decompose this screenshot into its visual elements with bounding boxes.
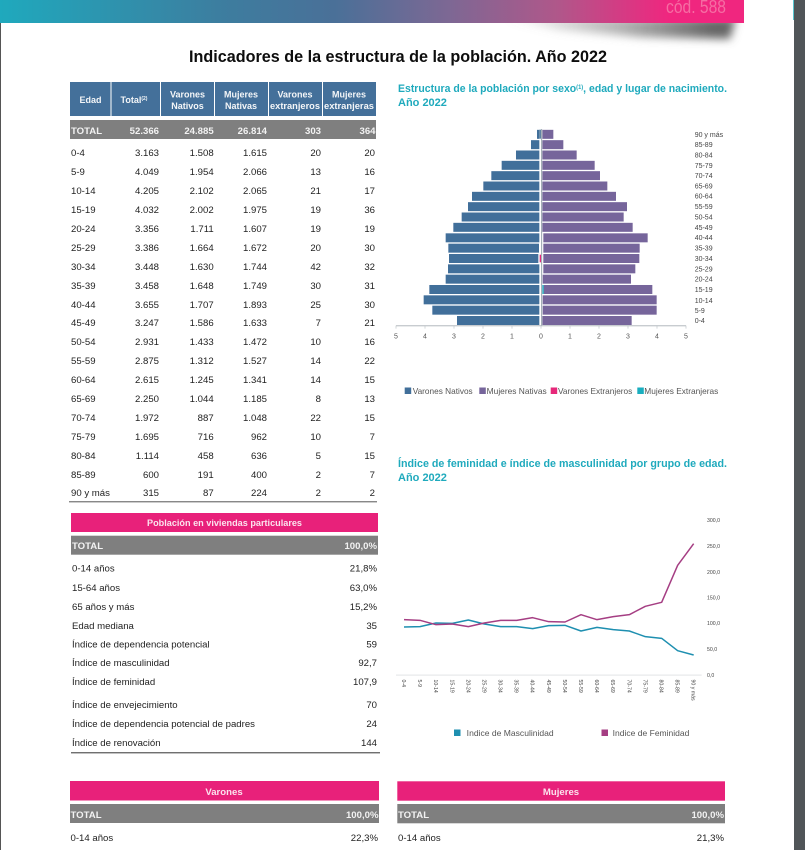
heading: pyramid chart xyxy=(398,83,727,109)
age rows: 15 xyxy=(364,451,375,462)
axis labels: 2 xyxy=(481,334,485,340)
age rows: 3.356 xyxy=(135,224,159,235)
x axis labels: 55-59 xyxy=(577,680,583,693)
y axis labels: 50,0 xyxy=(707,647,717,653)
age rows: 1.972 xyxy=(135,413,159,424)
indicator rows: 24 xyxy=(366,719,378,730)
age rows: 887 xyxy=(198,413,214,424)
age labels: 0-4 xyxy=(695,318,705,325)
axis labels: 0 xyxy=(539,334,543,340)
age rows: 22 xyxy=(310,413,321,424)
age rows: 15-19 xyxy=(71,205,96,216)
age labels xyxy=(695,132,724,325)
age rows: 2.102 xyxy=(190,186,214,197)
age rows: 1.711 xyxy=(190,224,214,235)
age rows: 962 xyxy=(251,432,267,443)
age rows: 20 xyxy=(310,243,321,254)
age rows: 1.695 xyxy=(135,432,159,443)
age rows: 1.607 xyxy=(243,224,267,235)
x axis labels: 40-44 xyxy=(529,680,535,693)
age rows: 70-74 xyxy=(71,413,96,424)
x axis labels: 90 y más xyxy=(690,680,696,701)
axis labels: 4 xyxy=(423,334,427,340)
panel: mujeres xyxy=(397,781,725,844)
axis labels: 5 xyxy=(394,334,398,340)
heading: pyramid chart: , edad y lugar de nacimiento. xyxy=(583,83,727,95)
indicator rows: 63,0% xyxy=(350,583,377,594)
indicator rows: 59 xyxy=(366,640,377,651)
y axis labels xyxy=(707,518,720,679)
age labels: 35-39 xyxy=(695,246,713,252)
indicator rows: Índice de dependencia potencial de padres xyxy=(72,719,255,730)
age rows: 7 xyxy=(370,470,375,481)
x axis labels: 65-69 xyxy=(609,680,615,693)
age rows: 1.245 xyxy=(190,375,214,386)
age rows: 40-44 xyxy=(71,300,96,311)
table header: extranjeros xyxy=(270,101,320,111)
x axis labels xyxy=(400,680,696,701)
total row: 24.885 xyxy=(184,126,214,137)
age rows: 35-39 xyxy=(71,281,96,292)
panel: varones: Varones xyxy=(205,787,243,798)
age rows: 1.707 xyxy=(190,300,214,311)
age rows: 1.114 xyxy=(136,451,160,462)
total row: 364 xyxy=(359,126,376,137)
total row: TOTAL xyxy=(72,541,103,552)
age labels: 60-64 xyxy=(695,194,713,200)
axis labels: 2 xyxy=(597,334,601,340)
axis labels: 1 xyxy=(510,334,514,340)
age rows: 2.002 xyxy=(190,205,214,216)
age rows: 19 xyxy=(310,205,321,216)
age rows: 458 xyxy=(198,451,214,462)
age rows: 19 xyxy=(310,224,321,235)
age rows: 10 xyxy=(310,337,321,348)
age rows: 85-89 xyxy=(71,470,96,481)
age labels: 85-89 xyxy=(695,142,713,149)
age rows: 21 xyxy=(364,318,375,329)
age rows: 1.341 xyxy=(243,375,267,386)
age labels: 20-24 xyxy=(695,276,713,284)
age rows: 20 xyxy=(310,148,321,159)
age labels: 70-74 xyxy=(695,173,713,180)
age rows: 10-14 xyxy=(71,186,96,197)
age rows: 30-34 xyxy=(71,262,96,273)
age rows: 1.048 xyxy=(243,413,267,424)
age rows: 7 xyxy=(316,318,321,329)
age rows: 4.205 xyxy=(135,186,159,197)
panel: mujeres: 100,0% xyxy=(691,810,724,821)
age labels: 55-59 xyxy=(695,204,713,211)
panel: población en viviendas particulares xyxy=(71,513,380,753)
age rows: 2.250 xyxy=(135,394,159,405)
age rows: 13 xyxy=(364,394,375,405)
table header: Nativas xyxy=(225,101,257,111)
panel heading: Población en viviendas particulares xyxy=(147,518,302,529)
x axis labels: 75-79 xyxy=(641,680,647,693)
age rows: 50-54 xyxy=(71,337,96,348)
age rows: 17 xyxy=(364,186,375,197)
age rows: 1.633 xyxy=(243,318,267,329)
age rows: 32 xyxy=(364,262,375,273)
table header: Mujeres xyxy=(332,90,366,100)
indicator rows: 107,9 xyxy=(353,677,377,688)
age rows: 36 xyxy=(364,205,375,216)
age rows: 42 xyxy=(310,262,321,273)
age rows: 10 xyxy=(310,432,321,443)
age rows: 716 xyxy=(198,432,214,443)
age labels: 10-14 xyxy=(695,298,713,305)
age rows: 19 xyxy=(364,224,375,235)
age rows: 315 xyxy=(143,488,159,499)
y axis labels: 250,0 xyxy=(707,544,720,550)
panel: varones: 22,3% xyxy=(351,833,378,844)
x axis labels: 20-24 xyxy=(464,680,470,693)
age rows: 80-84 xyxy=(71,451,96,462)
axis labels: 5 xyxy=(684,334,688,340)
axis labels: 1 xyxy=(568,334,572,340)
panel: mujeres: 21,3% xyxy=(697,833,724,844)
total row xyxy=(71,536,378,555)
age rows: 1.648 xyxy=(190,281,214,292)
total row: 26.814 xyxy=(238,126,268,137)
age rows: 1.044 xyxy=(190,394,214,405)
line chart legend: Indice de Masculinidad xyxy=(467,728,554,738)
age rows: 60-64 xyxy=(71,375,96,386)
age labels: 45-49 xyxy=(695,225,713,232)
age rows: 20-24 xyxy=(71,224,96,235)
indicator rows: 0-14 años xyxy=(72,564,115,575)
age rows: 25 xyxy=(310,300,321,311)
age rows: 2.875 xyxy=(135,356,159,367)
axis labels xyxy=(394,334,688,340)
panel: varones: 0-14 años xyxy=(70,833,113,844)
total row: TOTAL xyxy=(71,126,102,137)
table header: Varones xyxy=(277,90,313,100)
table header: Varones xyxy=(170,90,205,100)
y axis labels: 150,0 xyxy=(707,596,720,602)
table header: Mujeres xyxy=(224,90,258,100)
panel: mujeres: Mujeres xyxy=(543,787,579,798)
age rows: 1.749 xyxy=(243,281,267,292)
x axis labels: 70-74 xyxy=(625,680,631,693)
age rows: 191 xyxy=(198,470,214,481)
x axis labels: 80-84 xyxy=(657,680,663,693)
age rows: 87 xyxy=(203,488,214,499)
age rows: 45-49 xyxy=(71,318,96,329)
age rows: 16 xyxy=(364,167,375,178)
age rows: 90 y más xyxy=(71,488,110,499)
age labels: 25-29 xyxy=(695,266,713,274)
x axis labels: 45-49 xyxy=(545,680,551,693)
age rows: 30 xyxy=(310,281,321,292)
age rows: 5-9 xyxy=(71,167,85,178)
line chart legend: Indice de Feminidad xyxy=(613,728,690,738)
age rows: 5 xyxy=(316,451,321,462)
age rows: 3.655 xyxy=(135,300,159,311)
age rows: 1.312 xyxy=(190,356,214,367)
indicator rows: 15,2% xyxy=(350,602,377,613)
age rows: 0-4 xyxy=(71,148,86,159)
panel: varones: 100,0% xyxy=(346,810,379,821)
y axis labels: 100,0 xyxy=(707,621,720,627)
indicator rows: 70 xyxy=(366,700,377,711)
line chart legend xyxy=(454,728,690,738)
heading: pyramid chart: (1) xyxy=(576,85,583,91)
age labels: 30-34 xyxy=(695,256,713,263)
panel: varones: TOTAL xyxy=(70,810,102,821)
total row: 52.366 xyxy=(130,126,159,137)
age rows: 1.975 xyxy=(243,205,267,216)
title: Indicadores de la estructura de la población. Año 2022 xyxy=(189,47,607,66)
age rows: 3.247 xyxy=(135,318,159,329)
heading: line chart: Año 2022 xyxy=(398,472,447,484)
age rows: 1.185 xyxy=(243,394,267,405)
age rows: 2 xyxy=(316,488,321,499)
x axis labels: 60-64 xyxy=(593,680,599,693)
age rows: 22 xyxy=(364,356,375,367)
panel heading xyxy=(71,513,378,532)
age rows: 1.586 xyxy=(190,318,214,329)
age rows: 1.672 xyxy=(243,243,267,254)
age rows: 4.049 xyxy=(135,167,159,178)
age rows: 8 xyxy=(316,394,321,405)
indicator rows: 144 xyxy=(361,738,378,749)
age rows: 14 xyxy=(310,356,322,367)
total row xyxy=(70,120,376,139)
age rows: 75-79 xyxy=(71,432,96,443)
y axis labels: 200,0 xyxy=(707,570,720,576)
age rows: 14 xyxy=(310,375,322,386)
x axis labels: 35-39 xyxy=(513,680,519,693)
total row: 303 xyxy=(305,126,321,137)
indicator rows xyxy=(71,564,380,753)
indicator rows: 65 años y más xyxy=(72,602,135,613)
indicator rows: Índice de renovación xyxy=(72,738,161,749)
age rows: 636 xyxy=(251,451,267,462)
heading: pyramid chart: Año 2022 xyxy=(398,97,447,109)
age rows: 13 xyxy=(310,167,321,178)
age rows: 2.066 xyxy=(243,167,267,178)
indicator rows: Edad mediana xyxy=(72,621,135,632)
table header: (2) xyxy=(141,96,148,102)
heading: line chart: Índice de feminidad e índice de masculinidad por grupo de edad. xyxy=(398,457,727,470)
pyramid legend: Varones Extranjeros xyxy=(558,386,632,396)
age rows: 1.472 xyxy=(243,337,267,348)
indicator rows: Índice de envejecimiento xyxy=(72,700,178,711)
age rows: 16 xyxy=(364,337,375,348)
heading: line chart xyxy=(398,457,727,484)
age rows: 400 xyxy=(251,470,267,481)
y axis labels: 0,0 xyxy=(707,673,714,679)
age labels: 40-44 xyxy=(695,235,713,242)
age rows: 1.954 xyxy=(190,167,214,178)
age rows: 15 xyxy=(364,375,375,386)
x axis labels: 25-29 xyxy=(480,680,486,693)
age rows: 3.163 xyxy=(135,148,159,159)
x axis labels: 50-54 xyxy=(561,680,567,693)
age rows: 30 xyxy=(364,300,375,311)
indicator rows: 35 xyxy=(366,621,377,632)
age rows: 1.433 xyxy=(190,337,214,348)
age rows: 1.664 xyxy=(190,243,214,254)
indicator rows: Índice de dependencia potencial xyxy=(72,640,210,651)
age rows: 600 xyxy=(143,470,159,481)
x axis labels: 5-9 xyxy=(416,680,422,687)
age rows: 3.458 xyxy=(135,281,159,292)
total row: 100,0% xyxy=(344,541,377,552)
age rows: 20 xyxy=(364,148,375,159)
y axis labels: 300,0 xyxy=(707,518,720,524)
age rows: 4.032 xyxy=(135,205,159,216)
age rows: 2 xyxy=(370,488,375,499)
age rows: 25-29 xyxy=(71,243,96,254)
x axis labels: 30-34 xyxy=(496,680,502,693)
indicator rows: 15-64 años xyxy=(72,583,120,594)
age rows: 2.931 xyxy=(135,337,159,348)
axis labels: 3 xyxy=(626,334,630,340)
panel: population table xyxy=(69,82,377,502)
table header: extranjeras xyxy=(324,101,374,111)
table header xyxy=(70,82,376,116)
table header: Total xyxy=(121,95,141,105)
pyramid bars xyxy=(396,129,686,329)
table header: Nativos xyxy=(171,101,204,111)
age labels: 75-79 xyxy=(695,163,713,170)
age rows: 1.527 xyxy=(243,356,267,367)
age rows: 2.615 xyxy=(135,375,159,386)
panel: varones xyxy=(70,781,379,844)
age rows: 2.065 xyxy=(243,186,267,197)
age labels: 90 y más xyxy=(695,132,724,139)
chart: masculinity and femininity index xyxy=(396,518,720,738)
age rows: 65-69 xyxy=(71,394,96,405)
x axis labels: 10-14 xyxy=(432,680,438,693)
age rows xyxy=(69,148,377,502)
table header: Edad xyxy=(79,95,102,105)
axis labels: 3 xyxy=(452,334,456,340)
pyramid legend: Varones Nativos xyxy=(413,386,473,396)
age rows: 1.744 xyxy=(243,262,268,273)
chart: population pyramid xyxy=(394,129,724,396)
age rows: 3.386 xyxy=(135,243,159,254)
age rows: 7 xyxy=(370,432,375,443)
panel: mujeres: TOTAL xyxy=(398,810,429,821)
age rows: 1.893 xyxy=(243,300,267,311)
indicator rows: Índice de masculinidad xyxy=(72,658,170,669)
heading: pyramid chart: Estructura de la población por sexo xyxy=(398,83,585,95)
age rows: 3.448 xyxy=(135,262,159,273)
age rows: 15 xyxy=(364,413,375,424)
chart axis and lines xyxy=(396,544,702,675)
indicator rows: Índice de feminidad xyxy=(72,677,155,688)
x axis labels: 15-19 xyxy=(448,680,454,693)
indicator rows: 21,8% xyxy=(350,564,377,575)
axis labels: 4 xyxy=(655,334,659,340)
x axis labels: 0-4 xyxy=(400,680,406,687)
age labels: 50-54 xyxy=(695,214,713,222)
age rows: 21 xyxy=(310,186,321,197)
x axis labels: 85-89 xyxy=(674,680,680,693)
age labels: 80-84 xyxy=(695,152,713,160)
age rows: 1.615 xyxy=(243,148,267,159)
age rows: 2 xyxy=(316,470,321,481)
age labels: 15-19 xyxy=(695,287,713,294)
age rows: 31 xyxy=(364,281,375,292)
header banner xyxy=(0,0,744,39)
pyramid legend xyxy=(405,386,718,396)
indicator rows: 92,7 xyxy=(358,658,377,669)
age rows: 30 xyxy=(364,243,375,254)
age labels: 65-69 xyxy=(695,184,713,190)
age rows: 1.630 xyxy=(190,262,214,273)
age labels: 5-9 xyxy=(695,308,705,315)
age rows: 55-59 xyxy=(71,356,96,367)
pyramid legend: Mujeres Extranjeras xyxy=(644,386,718,396)
panel: mujeres: 0-14 años xyxy=(398,833,441,844)
age rows: 1.508 xyxy=(190,148,214,159)
age rows: 224 xyxy=(251,488,268,499)
pyramid legend: Mujeres Nativas xyxy=(487,386,547,396)
